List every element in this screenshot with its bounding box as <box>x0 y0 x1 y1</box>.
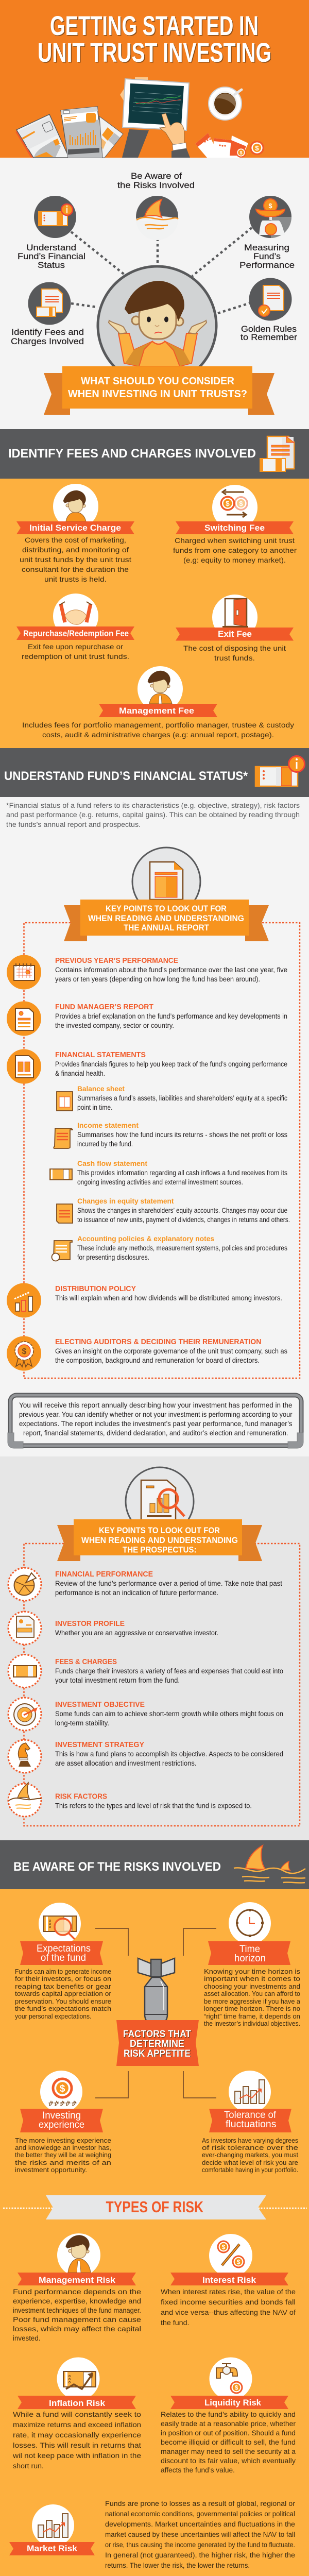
box: factors that determine risk appetite: RISK APPETITE <box>124 2048 191 2059</box>
text block: financial status definition: and past performance (e.g. returns, capital gains). This can be obtained by reading through <box>6 811 300 819</box>
card: time horizon: asset allocation. You can afford to <box>204 1990 300 1997</box>
text block: market risk: market caused by these uncertainties will affect the NAV to fall <box>105 2531 295 2538</box>
item: cash flow statement: Cash flow statement <box>77 1159 147 1167</box>
item: investor profile: INVESTOR PROFILE <box>55 1619 125 1628</box>
card: liquidity risk <box>161 2358 296 2474</box>
panel: annual report key points <box>7 848 300 1378</box>
label: be aware: the Risks Involved <box>117 180 195 190</box>
banner: types of risk <box>3 2195 307 2219</box>
card: repurchase redemption fee: redemption of unit trust funds. <box>22 652 129 660</box>
callout: pipe framed summary: report, financial statements, dividend declaration, and auditor’s election and remuneration. <box>23 1429 288 1437</box>
text block: market risk: In general (not guaranteed), the higher risk, the higher the <box>105 2551 295 2559</box>
card: exit fee <box>176 595 294 662</box>
item: fees and charges <box>55 1657 283 1684</box>
item: balance sheet: point in time. <box>77 1104 112 1111</box>
card: liquidity risk: in position or out of position. Should a fund <box>161 2429 296 2437</box>
box: factors that determine risk appetite <box>116 2020 199 2066</box>
text block: market risk: or rise, thus causing the income generated by the fund to fluctuate. <box>105 2541 295 2549</box>
item: electing auditors: the composition, background and remuneration for board of directors. <box>55 1357 260 1364</box>
card: management risk <box>13 2233 141 2342</box>
heading bar: understand status: UNDERSTAND FUND’S FINANCIAL STATUS* <box>4 769 248 783</box>
card: expectations of the fund: the fund’s expectations match <box>15 2005 111 2012</box>
card: expectations of the fund: your personal expectations. <box>15 2013 92 2020</box>
card: management fee <box>22 666 294 739</box>
card: interest risk: the fund. <box>161 2319 190 2327</box>
box: factors that determine risk appetite: RISK APPETITE <box>124 2049 191 2060</box>
label: identify fees <box>11 327 84 346</box>
heading bar: be aware of risks <box>0 1840 309 1889</box>
card: investing experience: and knowledge an investor has, <box>15 2144 111 2151</box>
item: electing auditors: ELECTING AUDITORS & DECIDING THEIR REMUNERATION <box>55 1337 262 1346</box>
item: fund manager report: FUND MANAGER’S REPORT <box>55 1003 153 1011</box>
card: initial service charge: Initial Service Charge <box>29 523 121 533</box>
card: liquidity risk: Liquidity Risk <box>204 2398 262 2408</box>
card: inflation risk: maximize returns and exceed inflation <box>13 2421 141 2429</box>
dotted connectors <box>71 228 252 313</box>
card: inflation risk: losses. This will result in returns that <box>13 2442 141 2449</box>
banner: key points annual report: WHEN READING AND UNDERSTANDING <box>88 913 244 923</box>
card: exit fee: trust funds. <box>214 654 255 662</box>
card: market risk: Market Risk <box>27 2544 78 2553</box>
item: risk factors <box>55 1792 252 1809</box>
panel: factors that determine risk appetite <box>15 1902 300 2174</box>
item: accounting policies: Accounting policies & explanatory notes <box>77 1234 214 1243</box>
item: balance sheet: Summarises a fund’s assets, liabilities and shareholders’ equity at a specific <box>77 1094 287 1102</box>
card: exit fee: The cost of disposing the unit <box>183 644 286 652</box>
card: expectations of the fund: towards capital appreciation or <box>15 1990 111 1997</box>
panel: header hero <box>0 0 309 158</box>
icon: document and check <box>249 278 291 320</box>
icon: award rosette <box>7 1336 41 1370</box>
heading bar: identify fees <box>0 429 309 479</box>
text block: market risk: Funds are prone to losses as a result of global, regional or <box>105 2500 296 2507</box>
label: measuring performance: Fund’s <box>253 251 281 261</box>
item: income statement: Income statement <box>77 1121 139 1129</box>
card: inflation risk: Inflation Risk <box>49 2398 106 2408</box>
card: interest risk: When interest rates rise, the value of the <box>161 2288 296 2296</box>
box: factors that determine risk appetite: DETERMINE <box>130 2039 185 2050</box>
connector lines <box>95 1928 216 2098</box>
text block: market risk: developments. Market uncertainties and fluctuations in the <box>105 2520 295 2528</box>
icon: award rosette: $ <box>22 1347 27 1356</box>
card: market risk <box>9 2504 95 2555</box>
label: understand status: Fund’s Financial <box>18 251 85 261</box>
card: tolerance of fluctuations <box>202 2071 299 2174</box>
icon: statements <box>7 1049 41 1084</box>
card: switching fee <box>173 485 297 564</box>
item: accounting policies: These include any methods, measurement systems, policies and procedures <box>77 1244 287 1252</box>
item: fund manager report: the invested company, sector or country. <box>55 1022 174 1029</box>
banner: what should you consider: WHAT SHOULD YOU CONSIDER <box>81 376 235 387</box>
card: expectations of the fund: for their investors, or focus on <box>15 1975 111 1982</box>
label: golden rules: Golden Rules <box>241 324 297 334</box>
banner: key points annual report: THE ANNUAL REPORT <box>124 923 210 933</box>
card: expectations of the fund: reaping tax benefits or gear <box>15 1983 111 1990</box>
card: interest risk: fixed income securities and bonds fall <box>161 2298 296 2306</box>
icon: chess knight <box>8 1740 41 1773</box>
callout: pipe framed summary: You will receive this report annually describing how your investment has performed in the <box>19 1401 293 1409</box>
label: measuring performance <box>239 243 295 270</box>
box: factors that determine risk appetite: FACTORS THAT <box>123 2029 191 2040</box>
icon: shark fin <box>136 196 178 240</box>
icon: rising bars <box>7 1283 41 1318</box>
banner: what should you consider <box>44 366 274 415</box>
icon: weighing scale: $ <box>268 202 272 210</box>
item: fees and charges: FEES & CHARGES <box>55 1657 117 1666</box>
item: changes in equity statement <box>57 1197 290 1224</box>
icon: manager report <box>7 1002 41 1036</box>
card: liquidity risk: discount to its fair value, which eventually <box>161 2457 296 2465</box>
item: distribution policy: This will explain when and how dividends will be distributed among investors. <box>55 1294 282 1302</box>
card: time horizon: “right” time frame, it depends on <box>204 2013 300 2020</box>
icon: document and money <box>28 282 71 325</box>
item: income statement: Summarises how the fund incurs its returns - shows the net profit or loss <box>77 1131 287 1139</box>
card: time horizon: longer time horizon. There is no <box>204 2005 300 2012</box>
card: repurchase redemption fee: Repurchase/Redemption Fee <box>23 629 129 638</box>
card: initial service charge: consultant for the duration the <box>22 565 129 573</box>
item: risk factors: This refers to the types and level of risk that the fund is exposed to. <box>55 1802 252 1809</box>
item: financial statements: Provides financials figures to help you keep track of the fund’s ongoing performance <box>55 1060 287 1068</box>
box: factors that determine risk appetite: FACTORS THAT <box>124 2029 192 2040</box>
card: investing experience: the better they will be at weighing <box>15 2151 111 2159</box>
card: switching fee: Switching Fee <box>204 523 265 533</box>
card: repurchase redemption fee <box>16 594 134 660</box>
item: investment strategy: This is how a fund plans to accomplish its objective. Aspects to be considered <box>55 1750 283 1758</box>
panel: what should you consider <box>11 171 297 415</box>
icon: pie chart <box>8 1568 41 1601</box>
icon: weighing scale <box>249 196 291 238</box>
item: cash flow statement: This provides information regarding all cash inflows a fund receives from its <box>77 1169 287 1177</box>
card: initial service charge: unit trusts is held. <box>44 575 107 583</box>
card: time horizon: Time <box>239 1944 260 1955</box>
label: be aware: Be Aware of <box>131 171 182 181</box>
label: golden rules: to Remember <box>241 332 297 342</box>
text block: market risk <box>105 2500 296 2569</box>
card: time horizon: horizon <box>234 1953 266 1964</box>
item: cash flow statement <box>50 1159 287 1186</box>
item: previous year performance: PREVIOUS YEAR’S PERFORMANCE <box>55 956 178 965</box>
item: investor profile: Whether you are an aggressive or conservative investor. <box>55 1629 218 1637</box>
card: tolerance of fluctuations: Tolerance of <box>224 2110 277 2121</box>
label: identify fees: Identify Fees and <box>11 327 84 337</box>
item: investment objective: Some funds can aim to achieve short-term growth while others might focus on <box>55 1710 283 1718</box>
item: balance sheet: Balance sheet <box>77 1084 125 1093</box>
item: distribution policy <box>55 1284 282 1302</box>
banner: key points prospectus: KEY POINTS TO LOOK OUT FOR <box>99 1526 220 1535</box>
item: electing auditors: Gives an insight on the corporate governance of the unit trust company, such as <box>55 1347 287 1355</box>
card: tolerance of fluctuations: comfortable having in your portfolio. <box>202 2166 298 2174</box>
card: management risk: losses, which may affect the capital <box>13 2325 141 2333</box>
card: time horizon: Knowing your time horizon is <box>204 1968 300 1975</box>
card: inflation risk: rate, it may occasionally experience <box>13 2431 141 2439</box>
item: accounting policies: for presenting disclosures. <box>77 1253 149 1261</box>
item: investment objective <box>55 1700 283 1727</box>
text block: market risk: returns. The lower the risk, the lower the returns. <box>105 2562 250 2569</box>
banner: what should you consider: WHEN INVESTING IN UNIT TRUSTS? <box>68 388 247 400</box>
card: tolerance of fluctuations: ever-changing markets, you must <box>202 2151 299 2159</box>
card: management risk: investment techniques of the fund manager. <box>13 2307 141 2314</box>
card: liquidity risk: manager may need to sell the security at a <box>161 2448 296 2455</box>
item: accounting policies <box>52 1234 287 1261</box>
illustration: envelopes and coins <box>195 133 264 158</box>
text block: financial status definition: the funds’s annual report and prospectus. <box>6 821 141 828</box>
label: measuring performance: Measuring <box>244 243 289 252</box>
card: expectations of the fund: preservation. You should ensure <box>15 1998 111 2005</box>
heading bar: understand status <box>0 748 309 797</box>
item: financial performance: performance is not an indication of future performance. <box>55 1589 218 1597</box>
banner: key points annual report <box>64 900 269 941</box>
icon: money note <box>8 1655 41 1688</box>
card: management fee: costs, audit & administrative charges (e.g: annual report, postage). <box>42 731 274 739</box>
card: tolerance of fluctuations: fluctuations <box>226 2119 276 2130</box>
item: previous year performance <box>55 956 287 983</box>
panel: types of risk <box>3 2195 307 2569</box>
card: time horizon <box>204 1902 300 2027</box>
item: fund manager report: Provides a brief explanation on the fund’s performance and key developments in <box>55 1012 287 1020</box>
banner: types of risk: TYPES OF RISK <box>106 2198 203 2216</box>
heading bar: be aware of risks: BE AWARE OF THE RISKS INVOLVED <box>13 1860 221 1874</box>
item: investment objective: long-term stability. <box>55 1719 109 1727</box>
card: management risk: invested. <box>13 2334 40 2342</box>
card: tolerance of fluctuations: As investors have varying degrees <box>202 2137 298 2144</box>
item: financial statements <box>55 1050 287 1077</box>
item: changes in equity statement: Changes in equity statement <box>77 1197 174 1205</box>
card: initial service charge: distributing, and monitoring of <box>22 546 129 554</box>
card: time horizon: be more aggressive if you have a <box>204 1998 300 2005</box>
card: investing experience: The more investing experience <box>15 2137 111 2144</box>
card: time horizon: choosing your investments and <box>204 1983 300 1990</box>
card: management fee: Includes fees for portfolio management, portfolio manager, trustee & custody <box>22 721 294 729</box>
text block: market risk: national economic conditions, governmental policies or political <box>105 2510 295 2518</box>
card: tolerance of fluctuations: of risk tolerance over the <box>202 2144 298 2151</box>
card: expectations of the fund: Funds can aim to generate income <box>15 1968 111 1975</box>
card: expectations of the fund: of the fund <box>41 1953 86 1963</box>
item: financial statements: & financial health. <box>55 1070 105 1077</box>
item: income statement: incurred by the fund. <box>77 1140 133 1148</box>
item: fund manager report <box>55 1003 287 1029</box>
card: interest risk <box>161 2234 296 2327</box>
item: investment objective: INVESTMENT OBJECTIVE <box>55 1700 145 1709</box>
illustration: tablet with hands <box>120 77 190 158</box>
card: investing experience: Investing <box>42 2110 81 2121</box>
item: financial performance: FINANCIAL PERFORMANCE <box>55 1570 153 1579</box>
text block: financial status definition: *Financial status of a fund refers to its characteristics (e.g. objective, strategy), risk factors <box>6 802 300 809</box>
card: management risk: experience, expertise, knowledge and <box>13 2297 141 2305</box>
illustration: confused boy <box>98 266 216 385</box>
text block: financial status definition <box>6 802 300 828</box>
card: investing experience: investment opportunity. <box>15 2166 87 2174</box>
icon: bomb <box>138 1958 175 2025</box>
item: financial performance <box>55 1570 282 1597</box>
icon: target <box>8 1698 41 1731</box>
item: investment strategy: INVESTMENT STRATEGY <box>55 1740 144 1749</box>
label: golden rules <box>241 324 297 342</box>
item: balance sheet <box>57 1084 287 1111</box>
card: switching fee: funds from one category to another <box>173 546 297 554</box>
card: time horizon: important when it comes to <box>204 1975 300 1982</box>
icon: calendar <box>7 955 41 989</box>
label: identify fees: Charges Involved <box>11 336 84 346</box>
icon: prospectus magnifier <box>126 1467 194 1535</box>
item: distribution policy: DISTRIBUTION POLICY <box>55 1284 136 1293</box>
card: expectations of the fund: Expectations <box>37 1943 91 1954</box>
box: factors that determine risk appetite: DETERMINE <box>130 2039 184 2049</box>
title <box>38 11 272 69</box>
card: expectations of the fund <box>15 1903 111 2020</box>
card: liquidity risk: become illiquid or difficult to sell, the fund <box>161 2438 296 2446</box>
item: electing auditors <box>55 1337 287 1364</box>
icon: annual report document <box>132 848 200 916</box>
card: investing experience: experience <box>39 2120 84 2130</box>
card: management risk: Poor fund management can cause <box>13 2316 141 2324</box>
card: inflation risk <box>12 2358 141 2470</box>
card: exit fee: Exit Fee <box>218 629 252 639</box>
item: investment strategy: are asset allocation and investment restrictions. <box>55 1759 197 1767</box>
label: measuring performance: Performance <box>239 260 295 270</box>
card: interest risk: Interest Risk <box>202 2275 256 2285</box>
card: management risk: Fund performance depends on the <box>13 2288 141 2296</box>
icon: shark fin <box>8 1783 41 1817</box>
card: investing experience: the risks and merits of an <box>15 2159 111 2166</box>
illustration: coffee cup <box>209 87 242 120</box>
callout: pipe framed summary: expectations. The report includes the investment’s past year performance, fund manager’s <box>19 1420 293 1428</box>
icon: investor profile <box>8 1612 41 1645</box>
banner: key points annual report: KEY POINTS TO LOOK OUT FOR <box>106 904 227 913</box>
card: time horizon: the investor’s individual objectives. <box>204 2020 300 2027</box>
label: understand status: Understand <box>26 243 76 252</box>
card: tolerance of fluctuations: decide what level of risk you are <box>202 2159 298 2166</box>
icon: money info <box>34 196 76 238</box>
card: liquidity risk: affects the fund’s value. <box>161 2466 235 2474</box>
item: financial statements: FINANCIAL STATEMENTS <box>55 1050 146 1059</box>
card: inflation risk: wil not keep pace with inflation in the <box>12 2452 141 2460</box>
label: be aware <box>117 171 195 190</box>
item: investment strategy <box>55 1740 283 1767</box>
card: inflation risk: While a fund will constantly seek to <box>13 2411 141 2418</box>
card: liquidity risk: Relates to the fund’s ability to quickly and <box>161 2411 296 2418</box>
illustration: papers <box>15 107 123 158</box>
item: fees and charges: Funds charge their investors a variety of fees and expenses that could eat into <box>55 1667 283 1675</box>
callout: pipe framed summary <box>8 1395 303 1448</box>
banner: key points prospectus: THE PROSPECTUS: <box>123 1545 197 1555</box>
card: liquidity risk: easily trade at a reasonable price, whether <box>161 2420 296 2428</box>
card: initial service charge <box>16 484 134 583</box>
item: income statement <box>54 1121 287 1148</box>
card: investing experience <box>15 2071 111 2174</box>
heading bar: identify fees: IDENTIFY FEES AND CHARGES INVOLVED <box>8 447 256 461</box>
card: management risk: Management Risk <box>39 2275 116 2285</box>
item: financial performance: Review of the fund’s performance over a period of time. Take note that past <box>55 1580 282 1587</box>
card: inflation risk: short run. <box>13 2462 44 2470</box>
item: investor profile <box>55 1619 218 1637</box>
item: previous year performance: years or ten years (depending on how long the fund has been around). <box>55 975 260 983</box>
card: initial service charge: Covers the cost of marketing, <box>25 536 126 544</box>
dotted frame <box>24 923 300 1378</box>
card: switching fee: (e.g: equity to money market). <box>183 556 286 564</box>
card: management fee: Management Fee <box>119 706 194 716</box>
item: cash flow statement: ongoing investing activities and external investment sources. <box>77 1178 243 1186</box>
card: switching fee: Charged when switching unit trust <box>175 536 295 545</box>
card: initial service charge: unit trust funds by the unit trust <box>20 555 131 564</box>
banner: key points prospectus <box>57 1519 262 1561</box>
card: interest risk: and vice versa--thus affecting the NAV of <box>161 2309 296 2316</box>
callout: pipe framed summary: previous year. You can identify whether or not your investment is performing according to your <box>19 1411 293 1418</box>
item: fees and charges: your total investment return from the fund. <box>55 1676 180 1684</box>
dotted frame <box>24 1544 300 1826</box>
label: understand status <box>18 243 85 270</box>
label: understand status: Status <box>38 260 65 270</box>
card: repurchase redemption fee: Exit fee upon repurchase or <box>28 642 123 651</box>
item: risk factors: RISK FACTORS <box>55 1792 107 1801</box>
item: previous year performance: Contains information about the fund’s performance over the last one year, five <box>55 966 287 974</box>
panel: prospectus key points <box>8 1467 300 1826</box>
banner: key points prospectus: WHEN READING AND UNDERSTANDING <box>81 1535 238 1545</box>
